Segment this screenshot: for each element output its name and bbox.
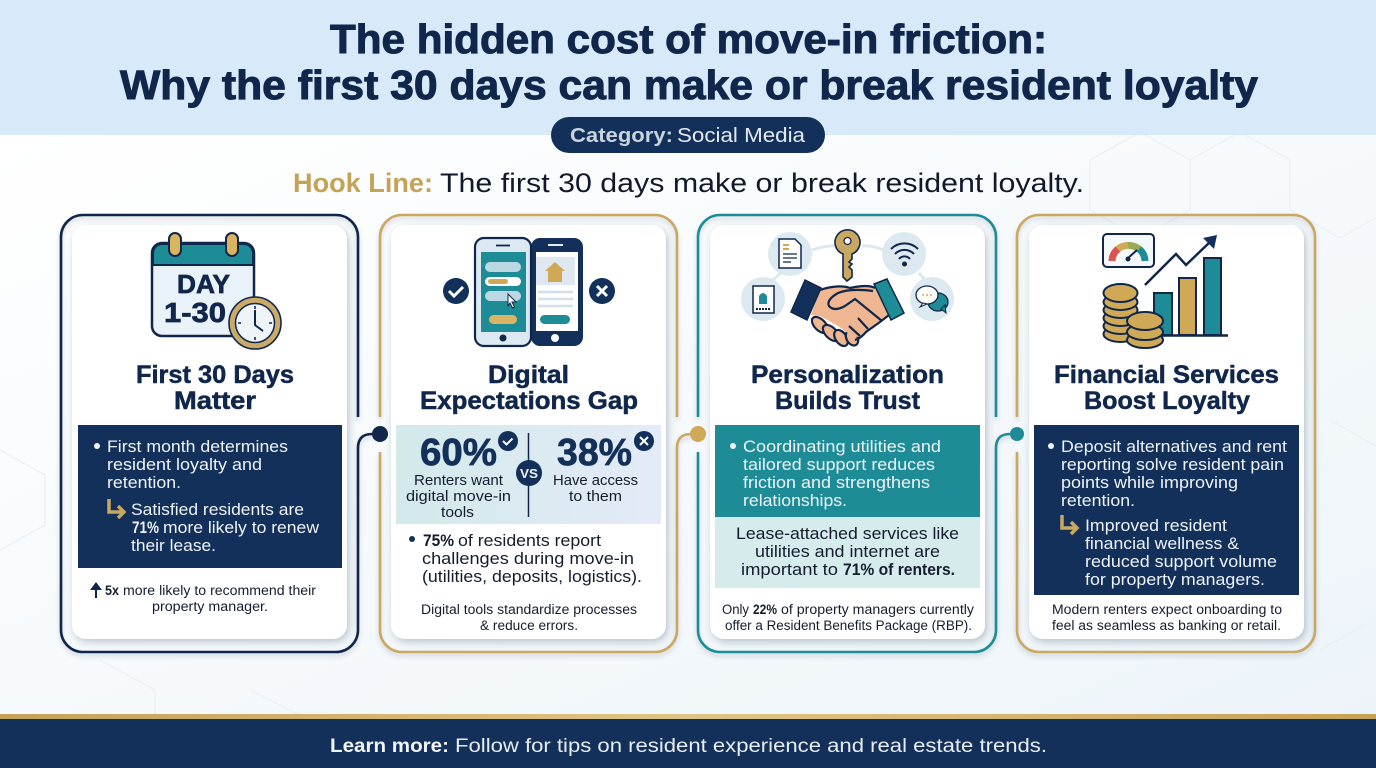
light teal callout: utilities and internet are	[755, 543, 940, 561]
navy text block: Satisfied residents are	[131, 501, 304, 519]
page background	[0, 135, 1376, 720]
navy text block	[1034, 425, 1299, 595]
card 4 frame	[1017, 215, 1315, 652]
bullet: challenges: (utilities, deposits, logistics).	[422, 568, 642, 586]
heading: Builds Trust	[775, 387, 921, 415]
connector dot 1	[372, 426, 388, 442]
title: Why the first 30 days can make or break resident loyalty	[120, 62, 1258, 108]
title	[120, 16, 1258, 108]
teal text block	[715, 425, 980, 517]
light teal callout: 71% of renters.	[843, 561, 955, 579]
note: RBP	[722, 602, 974, 633]
note: recommend: 5x	[105, 583, 119, 598]
heading	[1054, 361, 1279, 415]
navy text block: Improved resident	[1085, 517, 1227, 535]
title: The hidden cost of move-in friction:	[330, 16, 1047, 62]
heading	[136, 361, 294, 415]
navy text block: reduced support volume	[1085, 553, 1277, 571]
heading: Boost Loyalty	[1084, 387, 1250, 415]
note: recommend: more likely to recommend their	[123, 583, 317, 598]
teal text block: relationships.	[743, 492, 847, 510]
category pill	[551, 117, 825, 153]
light teal callout: important to	[741, 561, 838, 579]
comparison stats: Have access	[553, 472, 638, 489]
note: RBP: Only	[722, 602, 749, 617]
heading: Expectations Gap	[420, 387, 638, 415]
category pill: Social Media	[677, 125, 806, 147]
navy text block: reporting solve resident pain	[1061, 456, 1284, 474]
navy text block: resident loyalty and	[107, 456, 262, 474]
bullet: challenges: of residents report	[458, 532, 601, 550]
navy text block: for property managers.	[1085, 571, 1265, 589]
navy text block: their lease.	[131, 537, 216, 555]
note: digital tools: & reduce errors.	[480, 618, 578, 633]
heading: Digital	[488, 361, 569, 389]
icon: coins and growth chart	[1103, 234, 1228, 348]
icon: calendar with clock	[152, 233, 281, 349]
note: RBP: of property managers currently	[781, 602, 974, 617]
hook line: Hook Line:	[293, 168, 433, 198]
note: digital tools	[421, 602, 637, 633]
note: modern renters: feel as seamless as banking or retail.	[1052, 618, 1281, 633]
panel: personalization	[698, 215, 1017, 652]
note: modern renters	[1052, 602, 1282, 633]
navy text block: points while improving	[1061, 474, 1238, 492]
navy text block: retention.	[107, 474, 181, 492]
light teal callout	[715, 517, 980, 588]
card 1 frame and connector	[61, 215, 380, 652]
teal text block: tailored support reduces	[743, 456, 935, 474]
teal text block: Coordinating utilities and	[743, 438, 941, 456]
navy text block: Deposit alternatives and rent	[1061, 438, 1287, 456]
note: RBP: offer a Resident Benefits Package (RBP).	[725, 618, 972, 633]
hook line: The first 30 days make or break resident loyalty.	[440, 168, 1084, 198]
connector dot 2	[690, 426, 706, 442]
navy text block: financial wellness &	[1085, 535, 1239, 553]
icon: handshake and services	[741, 230, 954, 349]
note: digital tools: Digital tools standardize processes	[421, 602, 637, 617]
note: recommend: property manager.	[152, 599, 268, 614]
bullet: challenges	[409, 532, 642, 586]
light teal callout: Lease-attached services like	[736, 525, 959, 543]
navy text block: 71%	[132, 519, 159, 537]
heading: Personalization	[751, 361, 944, 389]
category pill: Category:	[570, 125, 673, 147]
bullet: challenges: 75%	[423, 532, 454, 550]
icon: calendar with clock: 1-30	[164, 297, 226, 328]
card 3 frame and connector	[698, 215, 1017, 652]
comparison stats: digital move-in	[406, 488, 511, 505]
navy text block: more likely to renew	[163, 519, 319, 537]
comparison stats: VS	[520, 466, 538, 481]
connector dot 3	[1010, 427, 1024, 441]
panel: first 30 days	[61, 215, 380, 652]
comparison stats	[396, 425, 661, 524]
comparison stats: 60%	[420, 432, 497, 474]
comparison stats: Renters want	[414, 472, 504, 489]
comparison stats: tools	[441, 504, 474, 521]
comparison stats: 38%	[557, 432, 632, 474]
card 2 frame and connector	[380, 215, 698, 652]
navy text block	[78, 425, 342, 568]
footer: Learn more:	[330, 736, 449, 757]
note: recommend	[90, 582, 317, 614]
heading: Financial Services	[1054, 361, 1279, 389]
icon: calendar with clock: DAY	[177, 269, 230, 299]
panel: digital expectations gap	[380, 215, 698, 652]
teal text block: friction and strengthens	[743, 474, 930, 492]
heading: Matter	[174, 387, 256, 415]
header band	[0, 0, 1376, 135]
icon: phones	[443, 238, 615, 346]
panel: financial services	[1017, 215, 1315, 652]
note: RBP: 22%	[753, 602, 777, 617]
heading: First 30 Days	[136, 361, 294, 389]
footer: Follow for tips on resident experience and real estate trends.	[455, 736, 1047, 757]
heading	[420, 361, 638, 415]
footer	[0, 714, 1376, 768]
comparison stats: to them	[569, 488, 622, 505]
navy text block: retention.	[1061, 492, 1135, 510]
note: modern renters: Modern renters expect onboarding to	[1052, 602, 1282, 617]
navy text block: First month determines	[107, 438, 288, 456]
heading	[751, 361, 944, 415]
bullet: challenges: challenges during move-in	[422, 550, 634, 568]
